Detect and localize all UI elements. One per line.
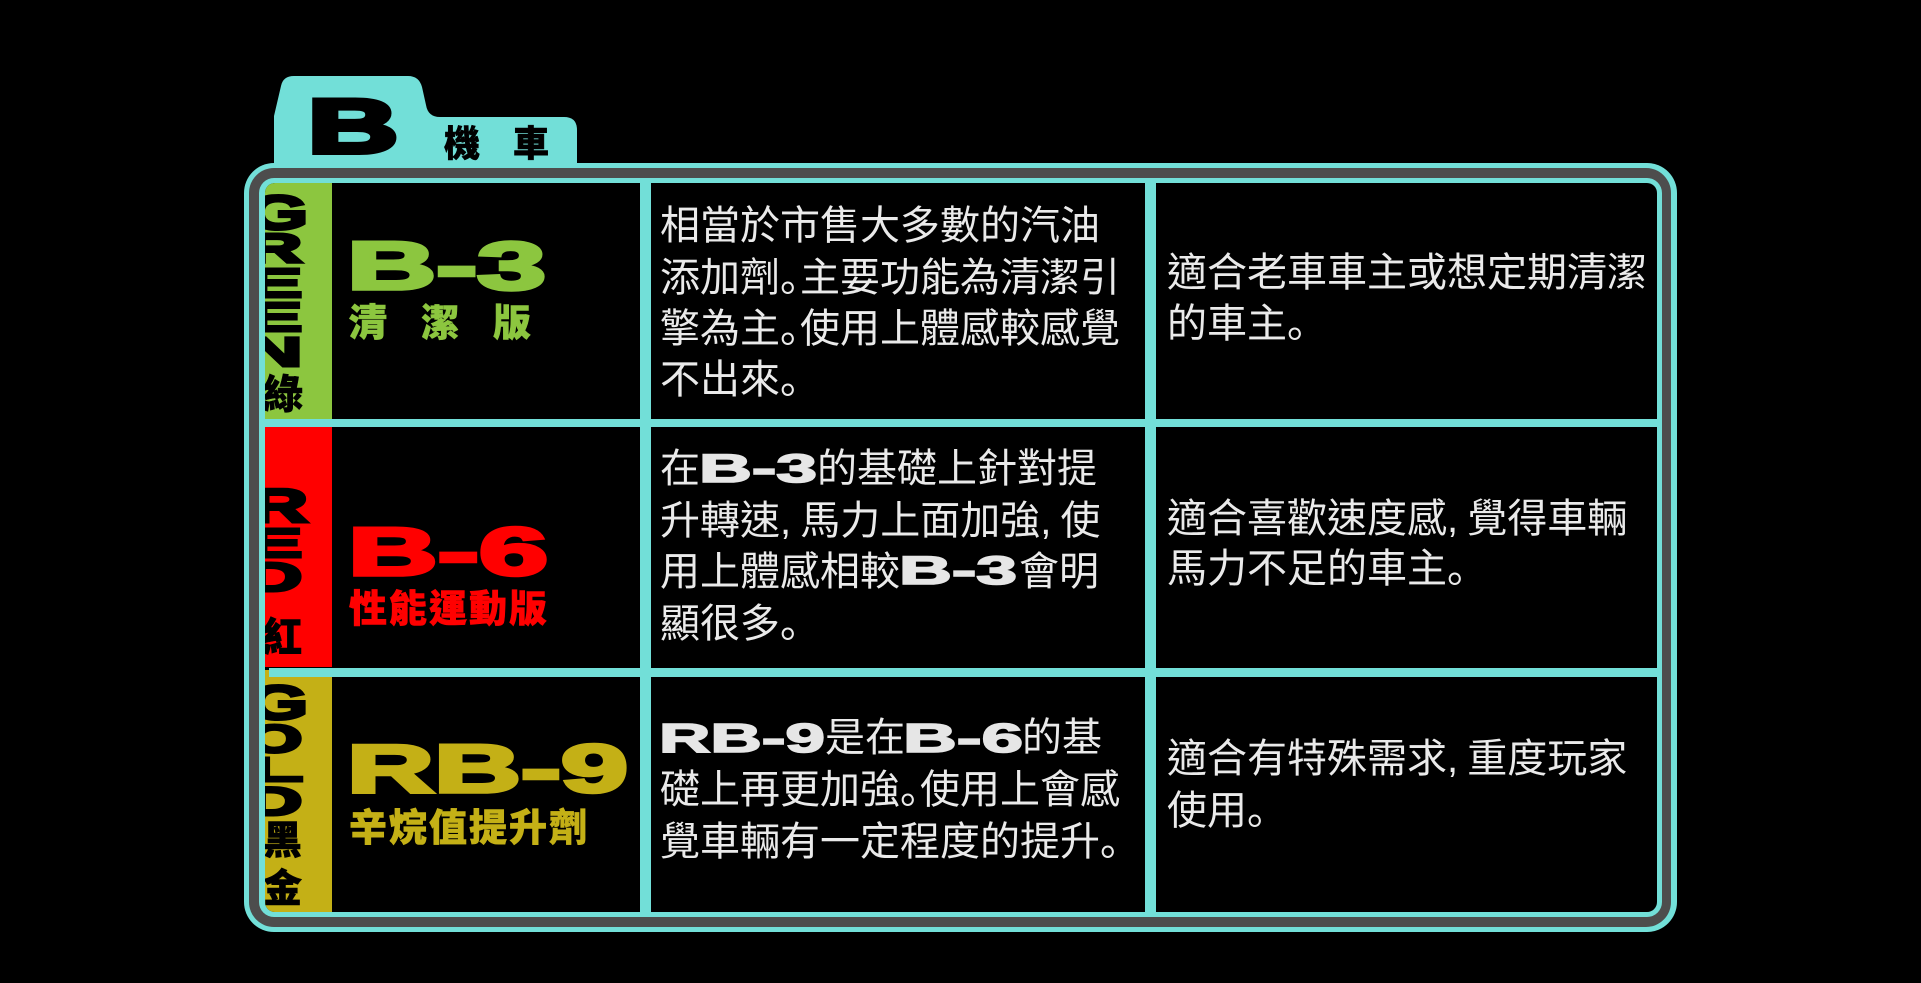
B-6 description: 用上體感相較 [660,550,900,594]
RB-9 audience [1167,737,1627,836]
B-3 description: 相當於市售大多數的汽油 [660,204,1100,248]
vertical label: RED: R [250,479,308,532]
B-3 description [660,204,1120,405]
B-6 description: 。 [780,591,820,649]
B-3 audience: 適合老車車主或想定期清潔 [1167,251,1647,295]
B-6 description: 的基礎上針對提 [817,447,1097,491]
B-3 subtitle: 潔 [421,292,459,347]
vertical label: GOLD: D [247,780,302,824]
product B-6 name: B-6 [348,514,548,590]
table frame [244,163,1677,932]
B-3 description: 擎為主 [660,307,780,351]
B-6 description: B-3 [899,549,1017,593]
B-3 subtitle: 版 [493,292,531,347]
vertical label: GREEN: E [247,260,302,306]
table grid lines [265,183,1657,912]
vertical label: GOLD: L [247,751,302,788]
RB-9 audience: 。 [1247,778,1287,836]
RB-9 description: B-6 [903,715,1023,761]
RB-9 description: 覺車輛有一定程度的提升 [660,820,1100,864]
B-3 description: 不出來 [660,358,780,402]
RB-9 audience: 使用 [1167,789,1247,833]
B-3 audience [1167,251,1647,349]
vertical label: GREEN: G [248,187,308,240]
B-6 description: B-3 [699,447,817,491]
vertical label: RED [265,488,311,655]
RB-9 description [659,715,1140,867]
tab label: 車 [513,115,549,167]
vertical label: GOLD: 金 [263,858,302,914]
B-3 description: 主要功能為清潔引 [800,256,1120,300]
RB-9 description: 的基 [1022,716,1102,760]
B-6 audience: 。 [1447,536,1487,594]
RB-9 description: RB-9 [659,715,825,761]
tab label: 機 [444,115,480,167]
B-3 description: 。 [780,245,820,303]
B-6 audience [1167,497,1627,594]
product B-3 name [347,228,546,347]
vertical label: GREEN: N [247,329,302,375]
product RB-9 name: RB-9 [347,731,628,807]
B-3 description: 使用上體感較感覺 [800,307,1120,351]
B-3 subtitle: 清 [349,292,387,347]
vertical label: RED: D [247,554,302,600]
B-6 description: 在 [660,447,700,491]
tab letter B: B [308,84,398,170]
product B-6 name [348,514,549,633]
vertical label: RED: E [247,520,302,566]
vertical label: GREEN [265,194,306,413]
RB-9 description: 礎上再更加強 [660,768,900,812]
RB-9 description: 。 [1100,809,1140,867]
RB-9 description: 是在 [825,716,905,760]
B-3 audience: 的車主 [1167,302,1287,346]
folder tab [274,76,577,170]
colour strips [265,183,332,912]
B-6 audience: 適合喜歡速度感, 覺得車輛 [1167,497,1627,541]
B-3 description: 添加劑 [660,256,780,300]
RB-9 description: 。 [900,757,940,815]
vertical label: RED: 紅 [262,605,302,663]
RB-9 description: 使用上會感 [920,768,1120,812]
product RB-9 name [347,731,628,852]
vertical label: GOLD: 黑 [263,810,302,866]
B-3 description: 。 [780,347,820,405]
vertical label: GREEN: R [247,225,302,271]
B-3 audience: 。 [1287,291,1327,349]
B-6 description: 顯很多 [660,602,780,646]
vertical label: GOLD: O [247,718,302,761]
vertical label: GOLD: G [248,677,308,730]
vertical label: GREEN: E [247,294,302,340]
product B-3 name: B-3 [347,228,546,304]
B-6 subtitle: 性能運動版 [349,578,549,633]
B-6 description [660,447,1100,649]
B-3 description: 。 [780,296,820,354]
vertical label: GOLD [265,684,306,906]
B-6 description: 升轉速, 馬力上面加強, 使 [660,499,1100,543]
vertical label: GREEN: 綠 [263,362,303,420]
RB-9 audience: 適合有特殊需求, 重度玩家 [1167,737,1627,781]
B-6 audience: 馬力不足的車主 [1167,547,1447,591]
B-6 description: 會明 [1019,550,1099,594]
RB-9 subtitle: 辛烷值提升劑 [349,797,589,852]
